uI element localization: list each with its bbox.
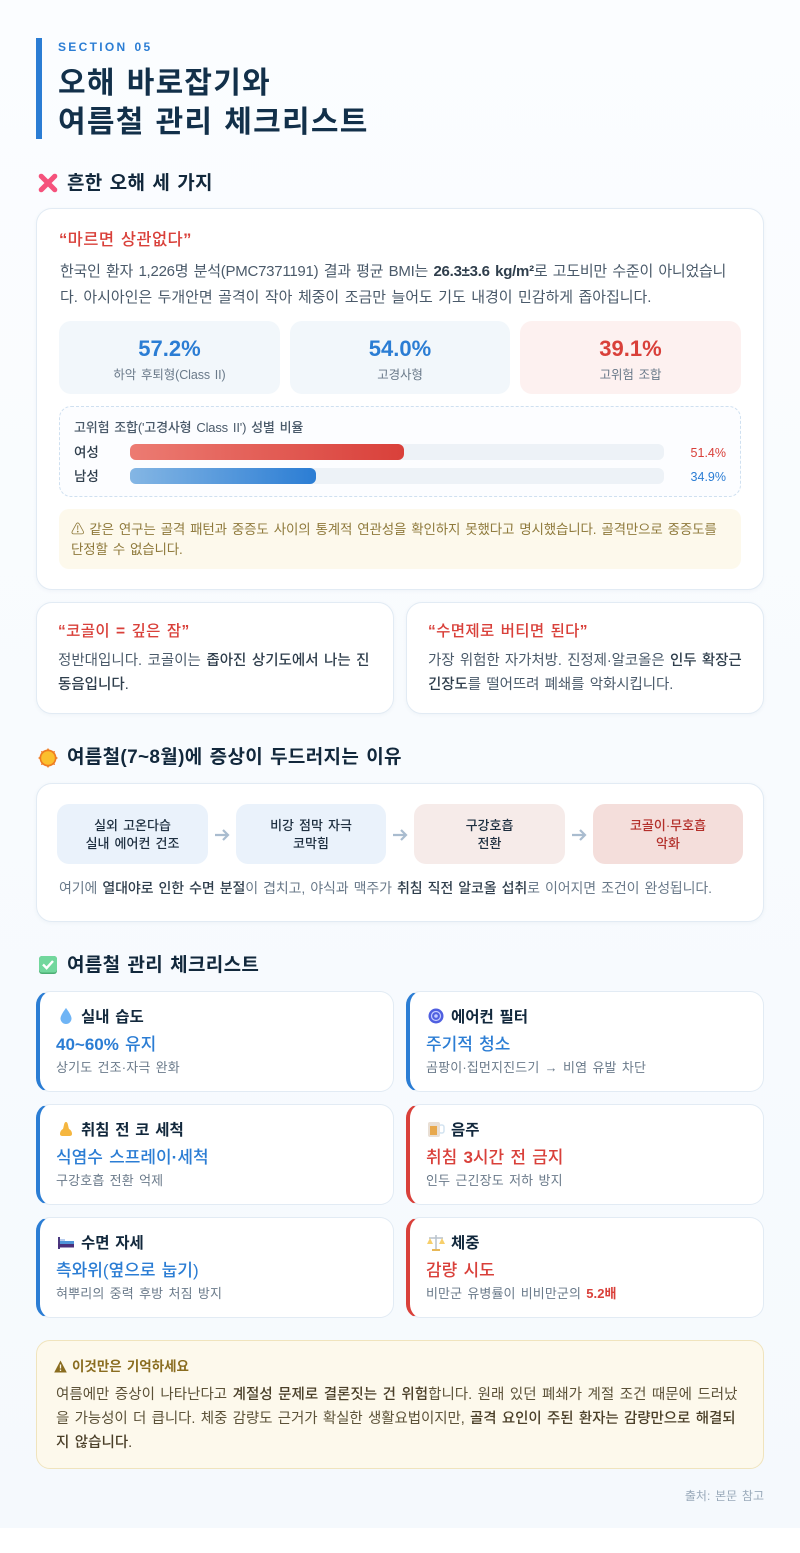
flow caption: 여기에 열대야로 인한 수면 분절이 겹치고, 야식과 맥주가 취침 직전 알코올 섭취로 이어지면 조건이 완성됩니다. — [59, 880, 712, 896]
icon: sun — [38, 748, 58, 768]
title: 여름철 관리 체크리스트 — [58, 106, 369, 139]
heading: checklist: 여름철 관리 체크리스트 — [67, 955, 259, 976]
section header — [36, 38, 369, 139]
panel: myth 3 — [406, 602, 764, 714]
checklist card: weight — [406, 1217, 764, 1318]
title: 오해 바로잡기와 — [58, 67, 271, 100]
myth title: “코골이 = 깊은 잠” — [58, 623, 190, 640]
item detail: 곰팡이·집먼지진드기 → 비염 유발 차단 — [426, 1060, 646, 1075]
item detail: 인두 근긴장도 저하 방지 — [426, 1173, 563, 1188]
step 1: 실내 에어컨 건조 — [86, 836, 179, 851]
label: 고경사형 — [377, 368, 423, 382]
step 3 — [414, 804, 565, 864]
callout title: 이것만은 기억하세요 — [72, 1359, 189, 1374]
step 2: 코막힘 — [293, 836, 329, 851]
panel: myth 2 — [36, 602, 394, 714]
item title: 실내 습도 — [81, 1009, 144, 1026]
checklist card: filter — [406, 991, 764, 1092]
bar chart: sex ratio — [59, 406, 741, 497]
step 1 — [57, 804, 208, 864]
icon: bed — [58, 1237, 74, 1249]
label: 하악 후퇴형(Class II) — [113, 368, 226, 382]
heading: common myths: 흔한 오해 세 가지 — [67, 173, 213, 194]
callout body: 지 않습니다. — [56, 1435, 132, 1451]
item title: 수면 자세 — [81, 1235, 144, 1252]
icon: warning — [54, 1360, 67, 1372]
icon: cross — [38, 174, 58, 192]
stat: convex — [290, 321, 510, 394]
icon: scales — [427, 1235, 445, 1251]
icon: droplet — [60, 1008, 72, 1024]
step 4 — [593, 804, 743, 864]
callout body: 여름에만 증상이 나타난다고 계절성 문제로 결론짓는 건 위험합니다. 원래 있던 폐쇄가 계절 조건 때문에 드러났 — [56, 1387, 738, 1403]
label: 고위험 조합 — [600, 368, 661, 382]
item value: 40~60% 유지 — [56, 1035, 156, 1054]
item value: 감량 시도 — [426, 1261, 495, 1280]
note text: ⚠ 같은 연구는 골격 패턴과 중증도 사이의 통계적 연관성을 확인하지 못했다고 명시했습니다. 골격만으로 중증도를 — [71, 522, 717, 537]
arrow — [393, 829, 408, 841]
step 3: 전환 — [478, 836, 501, 851]
note — [59, 509, 741, 569]
fill: female — [130, 444, 404, 460]
item title: 체중 — [451, 1235, 480, 1252]
callout: remember — [36, 1340, 764, 1469]
arrow — [215, 829, 230, 841]
item detail: 구강호흡 전환 억제 — [56, 1173, 163, 1188]
item detail: 비만군 유병률이 비비만군의 5.2배 — [426, 1286, 617, 1301]
title — [58, 67, 369, 139]
chart title: 고위험 조합('고경사형 Class II') 성별 비율 — [74, 420, 303, 435]
item detail: 혀뿌리의 중력 후방 처짐 방지 — [56, 1286, 222, 1301]
myth body: 가장 위험한 자가처방. 진정제·알코올은 인두 확장근 — [428, 653, 742, 669]
step 3: 구강호흡 — [466, 818, 513, 833]
myth body — [428, 652, 742, 693]
value: 54.0% — [369, 336, 431, 361]
step 4: 코골이·무호흡 — [630, 818, 706, 833]
icon: cyclone — [428, 1008, 444, 1024]
track: female — [130, 444, 664, 460]
arrow — [572, 829, 586, 841]
myth body: 다. 아시아인은 두개안면 골격이 작아 체중이 조금만 늘어도 기도 내경이 민감하게 좁아집니다. — [60, 289, 651, 306]
item value: 취침 3시간 전 금지 — [426, 1148, 563, 1167]
myth body: 정반대입니다. 코골이는 좁아진 상기도에서 나는 진 — [58, 653, 370, 669]
checklist card: posture — [36, 1217, 394, 1318]
myth body — [60, 263, 726, 306]
source note: 출처: 본문 참고 — [685, 1489, 764, 1503]
myth body: 한국인 환자 1,226명 분석(PMC7371191) 결과 평균 BMI는 26.3±3.6 kg/m²로 고도비만 수준이 아니었습니 — [60, 263, 726, 280]
label: male: 남성 — [74, 469, 99, 484]
item title: 음주 — [451, 1122, 480, 1139]
value: 57.2% — [138, 336, 201, 361]
callout body — [56, 1386, 738, 1451]
step 2: 비강 점막 자극 — [270, 818, 352, 833]
fill: male — [130, 468, 316, 484]
note text — [71, 522, 717, 557]
panel: myth 1 — [36, 208, 764, 590]
heading: why summer: 여름철(7~8월)에 증상이 두드러지는 이유 — [67, 747, 402, 768]
myth body — [58, 652, 370, 693]
value: male: 34.9% — [691, 470, 726, 484]
item title: 에어컨 필터 — [451, 1009, 528, 1026]
item title: 취침 전 코 세척 — [81, 1122, 184, 1139]
item value: 주기적 청소 — [426, 1035, 510, 1054]
item value: 측와위(옆으로 눕기) — [56, 1261, 199, 1280]
icon: check mark — [39, 956, 57, 974]
checklist card: alcohol — [406, 1104, 764, 1205]
value: female: 51.4% — [691, 446, 726, 460]
track: male — [130, 468, 664, 484]
checklist card: humidity — [36, 991, 394, 1092]
note text: 단정할 수 없습니다. — [71, 542, 183, 557]
myth title: “마르면 상관없다” — [59, 231, 192, 249]
step 2 — [236, 804, 386, 864]
myth body: 긴장도를 떨어뜨려 폐쇄를 악화시킵니다. — [428, 677, 673, 693]
icon: nose — [60, 1122, 72, 1136]
section label: SECTION 05 — [58, 40, 152, 54]
accent bar — [36, 38, 42, 139]
myth title: “수면제로 버티면 된다” — [428, 623, 588, 640]
value: 39.1% — [599, 336, 662, 361]
icon: beer mug — [428, 1122, 445, 1137]
myth body: 동음입니다. — [58, 677, 129, 693]
item detail: 상기도 건조·자극 완화 — [56, 1060, 180, 1075]
stat: high risk — [520, 321, 741, 394]
step 4: 악화 — [656, 836, 680, 851]
panel: mechanism flow — [36, 783, 764, 922]
step 1: 실외 고온다습 — [94, 818, 171, 833]
label: female: 여성 — [74, 445, 99, 460]
checklist card: nasal wash — [36, 1104, 394, 1205]
item value: 식염수 스프레이·세척 — [56, 1148, 209, 1167]
callout body: 을 가능성이 더 큽니다. 체중 감량도 근거가 확실한 생활요법이지만, 골격 요인이 주된 환자는 감량만으로 해결되 — [56, 1411, 735, 1427]
stat: class II — [59, 321, 280, 394]
